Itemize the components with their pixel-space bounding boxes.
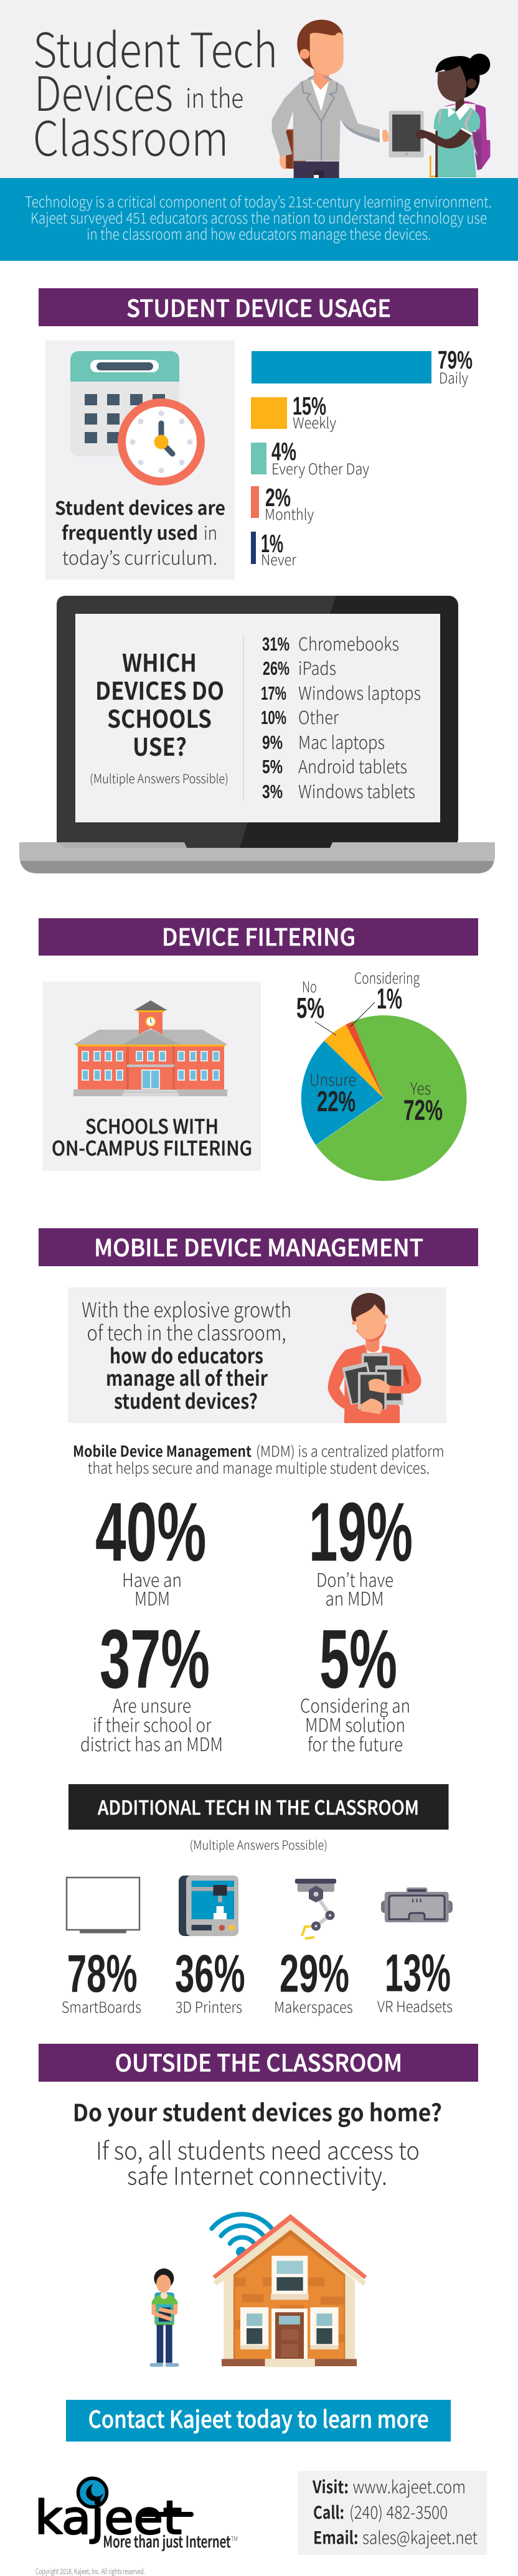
bar chart: device usage frequency (251, 346, 473, 570)
call to action: Contact Kajeet today to learn more (88, 2400, 429, 2435)
panel text: manage all of their (106, 1362, 268, 1392)
panel: calendar and clock (45, 341, 235, 580)
stat: smartboards (62, 1945, 141, 2017)
stat: 37% are unsure: 37% (100, 1613, 210, 1706)
statement: safe Internet connectivity. (127, 2158, 387, 2193)
logo: kajeet (35, 2478, 238, 2552)
mdm definition: (MDM) is a centralized platform (256, 1439, 445, 1461)
device list: Other (298, 703, 339, 730)
panel caption: SCHOOLS WITH (85, 1111, 219, 1140)
pie chart: on-campus filtering: Yes (410, 1076, 431, 1099)
stat: 40% have an mdm: Have an (122, 1565, 182, 1592)
stat: 40% have an mdm: 40% (95, 1486, 207, 1579)
intro band (0, 178, 518, 261)
bar chart: device usage frequency: Daily (439, 366, 468, 388)
statement: If so, all students need access to (96, 2132, 420, 2167)
stat: 5% considering an mdm: Considering an (300, 1691, 410, 1718)
icon: smartboard (67, 1878, 139, 1934)
stat: 37% are unsure: Are unsure (113, 1691, 191, 1718)
stat: 5% considering an mdm: 5% (319, 1613, 397, 1706)
laptop heading (90, 644, 228, 787)
stat: 3d printers: 36% (175, 1945, 245, 2003)
device list: 10% (261, 707, 286, 728)
mdm definition: that helps secure and manage multiple student devices. (88, 1456, 430, 1478)
stat: 5% considering an mdm: MDM solution (305, 1710, 405, 1737)
pie chart: on-campus filtering: 1% (377, 982, 402, 1015)
bar chart: device usage frequency: 2% (265, 483, 291, 512)
mdm definition (73, 1439, 445, 1478)
illustration: wifi house and student (150, 2214, 367, 2367)
bar chart: device usage frequency: Monthly (265, 502, 314, 524)
note: (Multiple Answers Possible) (189, 1835, 327, 1853)
section heading: student device usage: STUDENT DEVICE USAGE (126, 289, 391, 324)
stat: 37% are unsure: district has an MDM (80, 1729, 223, 1757)
panel text: student devices? (114, 1385, 258, 1415)
panel caption: frequently used (62, 518, 198, 545)
bar chart: device usage frequency: Weekly (293, 411, 336, 433)
device list: Windows tablets (298, 778, 415, 804)
subheading: additional tech in the classroom (68, 1784, 448, 1830)
contact panel: sales@kajeet.net (362, 2525, 478, 2550)
illustration: teacher handing tablet to student (272, 20, 490, 178)
icon: calendar (70, 351, 179, 456)
stat: 19% don't have an mdm: 19% (309, 1486, 413, 1579)
section heading: student device usage (39, 288, 478, 326)
header panel (0, 0, 518, 178)
stat: 5% considering an mdm (300, 1613, 410, 1757)
stat: smartboards: SmartBoards (62, 1995, 141, 2017)
bar chart: device usage frequency: 79% (438, 346, 473, 374)
pie chart: on-campus filtering: 72% (403, 1094, 443, 1126)
device list: Chromebooks (298, 630, 399, 656)
section heading: device filtering: DEVICE FILTERING (162, 918, 356, 952)
section heading: outside the classroom: OUTSIDE THE CLASSROOM (115, 2044, 402, 2079)
panel caption (55, 493, 225, 570)
panel text: With the explosive growth (82, 1294, 291, 1323)
logo: kajeet: TM (231, 2534, 238, 2543)
stat: smartboards: 78% (67, 1945, 138, 2003)
section heading: mobile device management: MOBILE DEVICE MANAGEMENT (94, 1229, 423, 1263)
section heading: outside the classroom (39, 2044, 478, 2082)
bar chart: device usage frequency: Never (261, 548, 296, 570)
panel caption: today’s curriculum. (62, 543, 217, 570)
icon: robotic arm (295, 1879, 336, 1939)
panel caption: Student devices are (55, 493, 225, 520)
stat: 19% don't have an mdm (309, 1486, 413, 1611)
statement (96, 2132, 420, 2193)
panel caption: in (204, 518, 217, 545)
intro text: in the classroom and how educators manage these devices. (87, 222, 431, 244)
title (33, 12, 278, 169)
pie chart: on-campus filtering: Unsure (309, 1068, 356, 1091)
contact panel: Visit: (312, 2474, 349, 2499)
pie chart: on-campus filtering (296, 966, 467, 1181)
pie chart: on-campus filtering: No (302, 975, 317, 997)
stat: vr headsets (377, 1944, 453, 2016)
stat: 40% have an mdm: MDM (134, 1584, 170, 1611)
panel text (82, 1294, 291, 1415)
subheading: additional tech in the classroom: ADDITIONAL TECH IN THE CLASSROOM (98, 1792, 419, 1820)
laptop heading: WHICH (122, 644, 197, 679)
device list: Android tablets (298, 753, 407, 779)
device list: 17% (261, 682, 286, 704)
stat: makerspaces: Makerspaces (274, 1995, 353, 2017)
stat: 3d printers (175, 1945, 245, 2017)
stat: 37% are unsure: if their school or (93, 1710, 212, 1737)
device list: 9% (262, 731, 283, 753)
contact panel: Call: (313, 2499, 344, 2524)
stat: makerspaces (274, 1945, 353, 2017)
logo wordmark: kajeet (35, 2491, 182, 2545)
pie chart: on-campus filtering: 22% (317, 1085, 356, 1117)
contact panel (298, 2471, 487, 2555)
pie chart: on-campus filtering: 5% (296, 992, 324, 1024)
intro text (25, 190, 492, 244)
pie chart: on-campus filtering: Considering (354, 966, 420, 988)
laptop heading: SCHOOLS (107, 700, 212, 735)
bar chart: device usage frequency: 15% (293, 392, 326, 420)
title: Classroom (33, 101, 228, 169)
laptop heading: DEVICES DO (95, 672, 224, 707)
device list: 3% (262, 781, 283, 802)
panel caption: ON-CAMPUS FILTERING (52, 1133, 252, 1162)
logo mark: swirl circle (78, 2478, 107, 2507)
title: in the (186, 78, 243, 116)
question: Do your student devices go home? (73, 2094, 442, 2128)
panel text: of tech in the classroom, (87, 1317, 286, 1347)
panel: how do educators manage devices (68, 1287, 446, 1423)
device list: 31% (262, 633, 290, 655)
contact panel: www.kajeet.com (353, 2474, 466, 2499)
icon: clock (118, 398, 205, 486)
contact panel: (240) 482-3500 (349, 2499, 448, 2524)
stat: 5% considering an mdm: for the future (308, 1729, 403, 1757)
device list: 5% (262, 756, 283, 778)
stat: vr headsets: 13% (385, 1944, 451, 2003)
device list: iPads (298, 654, 336, 680)
icon: 3d printer (179, 1876, 238, 1936)
laptop heading: (Multiple Answers Possible) (90, 769, 228, 787)
stat: 3d printers: 3D Printers (176, 1995, 242, 2017)
stat: makerspaces: 29% (280, 1945, 349, 2003)
title: Devices (34, 56, 173, 125)
bar chart: device usage frequency: Every Other Day (271, 457, 369, 479)
stat: 19% don't have an mdm: Don’t have (316, 1565, 393, 1592)
bar chart: device usage frequency: 4% (271, 437, 296, 466)
laptop: which devices do schools use (19, 596, 495, 873)
device list: Mac laptops (298, 728, 385, 754)
device list: 26% (263, 657, 290, 679)
section heading: device filtering (39, 918, 478, 956)
stat: vr headsets: VR Headsets (377, 1995, 453, 2016)
panel caption (52, 1111, 252, 1162)
stat: 37% are unsure (80, 1613, 223, 1757)
icon: school building (73, 1000, 228, 1096)
mdm definition: Mobile Device Management (73, 1439, 252, 1461)
icon: vr headset (381, 1887, 453, 1922)
stat: 19% don't have an mdm: an MDM (325, 1584, 384, 1611)
panel text: how do educators (110, 1340, 263, 1370)
title: Student Tech (33, 12, 278, 81)
contact panel: Email: (313, 2525, 359, 2550)
illustration: educator holding tablets (328, 1293, 421, 1423)
panel: schools with on-campus filtering (42, 982, 261, 1171)
bar chart: device usage frequency: 1% (261, 529, 283, 558)
stat: 40% have an mdm (95, 1486, 207, 1611)
logo tagline: More than just Internet (103, 2530, 231, 2552)
laptop heading: USE? (133, 728, 187, 763)
device list: Windows laptops (298, 679, 421, 705)
device list (261, 630, 421, 804)
